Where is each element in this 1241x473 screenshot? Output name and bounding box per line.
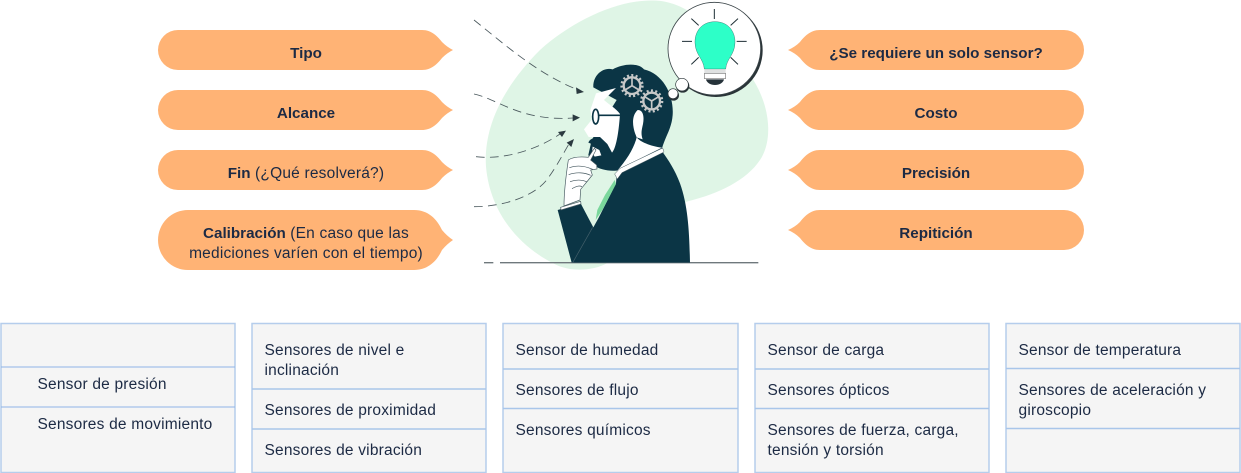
sensor column 5: Sensores de aceleración y	[1018, 382, 1206, 399]
left callout: Tipo	[158, 30, 453, 70]
sensor column 4: Sensores de fuerza, carga,	[768, 422, 959, 439]
hand	[561, 148, 597, 210]
sensor column 4: Sensores ópticos	[768, 382, 890, 399]
right callout: Costo	[788, 90, 1084, 130]
left callout: Tipo: Tipo	[290, 45, 322, 62]
sensor column 1: Sensores de movimiento	[38, 416, 212, 433]
head silhouette	[588, 65, 673, 171]
left callout: Alcance	[158, 90, 453, 130]
sensor column 3: Sensor de humedad	[516, 342, 658, 359]
sensor column 2: inclinación	[264, 362, 339, 379]
dashed arrows	[474, 20, 577, 207]
sensor column 3: Sensores de flujo	[516, 382, 639, 399]
background blob	[486, 0, 768, 270]
sensor column 3: Sensores químicos	[516, 422, 651, 439]
sensor column 4: Sensor de carga	[768, 342, 884, 359]
right callout: Repitición	[788, 210, 1084, 250]
glasses	[593, 109, 620, 124]
sleeve seam	[573, 227, 593, 263]
arrow heads	[558, 87, 584, 147]
sensor column 4: tensión y torsión	[768, 442, 884, 459]
sensor column 3	[503, 324, 738, 472]
sensor column 5: giroscopio	[1018, 402, 1091, 419]
sensor column 5	[1006, 324, 1240, 472]
small thought bubbles	[668, 90, 679, 101]
left callout: Calibración: mediciones varíen con el tiempo)	[189, 245, 423, 262]
sensor column 4	[755, 324, 989, 472]
left callout: Calibración: Calibración (En caso que las	[203, 225, 409, 242]
right callout: ¿Se requiere un solo sensor?: ¿Se requiere un solo sensor?	[829, 45, 1043, 62]
right callout: Repitición: Repitición	[899, 225, 973, 242]
ear	[633, 110, 644, 139]
lip	[592, 147, 601, 157]
illustration: thinking man with light bulb	[474, 0, 768, 270]
moustache	[588, 138, 607, 153]
ground line	[484, 261, 758, 265]
left callout: Fin	[158, 150, 453, 190]
right callout: Precisión: Precisión	[902, 165, 970, 182]
sensor column 2: Sensores de vibración	[264, 442, 422, 459]
sensor column 1: Sensor de presión	[38, 376, 167, 393]
right callout: Precisión	[788, 150, 1084, 190]
gears	[622, 75, 662, 111]
left callout: Alcance: Alcance	[277, 105, 335, 122]
sensor column 2: Sensores de proximidad	[264, 402, 436, 419]
sensor column 5: Sensor de temperatura	[1018, 342, 1181, 359]
sensor column 2	[252, 324, 486, 472]
tie	[596, 180, 616, 220]
left callout: Calibración	[158, 210, 453, 270]
light bulb	[682, 9, 747, 85]
sensor column 2: Sensores de nivel e	[264, 342, 404, 359]
neck	[617, 137, 662, 171]
collar	[615, 148, 664, 179]
thought bubble	[669, 4, 763, 97]
right callout: ¿Se requiere un solo sensor?	[788, 30, 1084, 70]
left callout: Fin: Fin (¿Qué resolverá?)	[228, 165, 384, 182]
face	[584, 88, 620, 153]
right callout: Costo: Costo	[914, 105, 958, 122]
sensor column 1	[1, 324, 235, 472]
jacket	[558, 152, 690, 263]
